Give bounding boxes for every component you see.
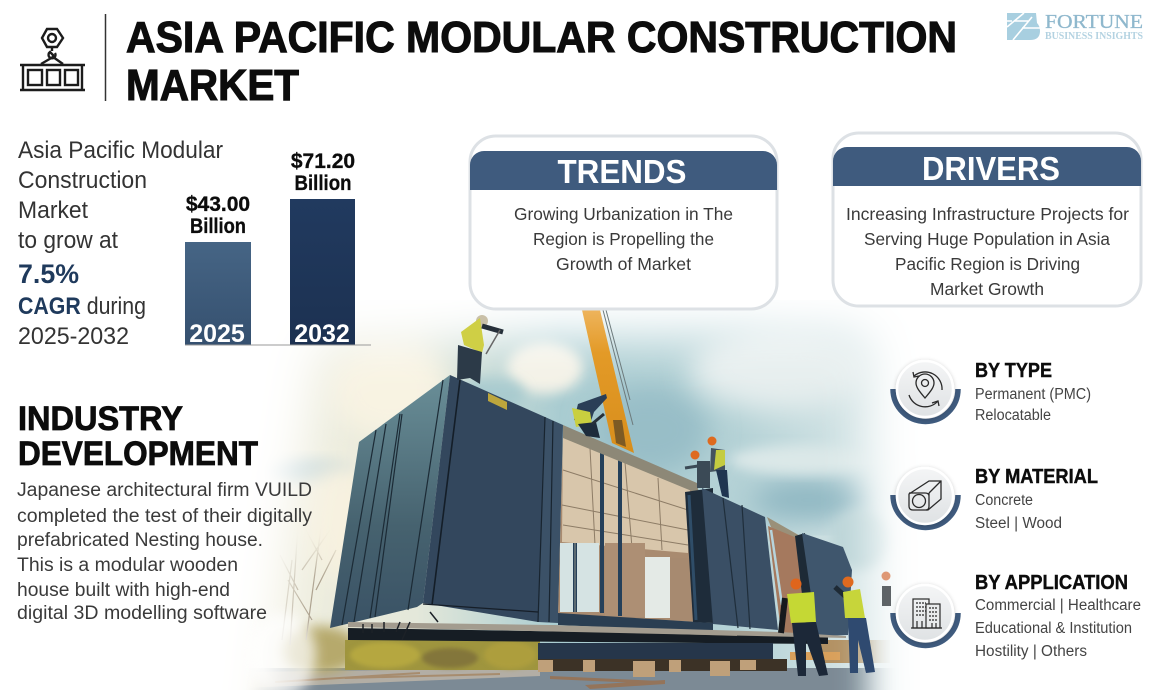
distant worker <box>882 572 891 606</box>
bar 2032: 2032 <box>294 320 350 348</box>
icon: by type <box>893 361 958 422</box>
logo: Fortune Business Insights: BUSINESS INSIGHTS <box>1045 31 1143 42</box>
logo: Fortune Business Insights: FORTUNE <box>1045 11 1143 33</box>
panel: drivers: Pacific Region is Driving <box>895 254 1080 274</box>
market growth text: Asia Pacific Modular <box>18 137 223 164</box>
floor beam and pedestal <box>348 628 828 689</box>
panel: trends: TRENDS <box>558 153 686 190</box>
crane boom <box>582 310 634 453</box>
photo: modular unit lifted by crane <box>250 310 896 690</box>
bar 2025: Billion <box>190 215 246 238</box>
market growth text: Construction <box>18 167 147 194</box>
industry development heading: INDUSTRY <box>18 400 183 438</box>
panel: trends <box>470 136 777 309</box>
by material text: Concrete <box>975 492 1033 509</box>
header divider <box>104 14 106 101</box>
worker ground right <box>835 576 875 673</box>
bar 2032: Billion <box>294 172 352 195</box>
container front panel <box>423 375 545 622</box>
market growth text: to grow at <box>18 227 118 254</box>
bar 2032: $71.20 <box>291 150 355 173</box>
by type text: Relocatable <box>975 407 1051 424</box>
title: MARKET <box>126 61 299 110</box>
worker pair on roof <box>685 436 729 498</box>
industry development heading <box>18 400 258 473</box>
industry development body text <box>17 480 313 624</box>
by type text: Permanent (PMC) <box>975 386 1091 403</box>
industry development body text: house built with high-end <box>17 580 230 601</box>
industry development body text: This is a modular wooden <box>17 555 238 576</box>
icon: by application <box>893 585 958 646</box>
panel: drivers: Increasing Infrastructure Projects for <box>846 204 1129 224</box>
panel: trends: Growing Urbanization in The <box>514 204 733 224</box>
bar 2025: $43.00 <box>186 193 250 216</box>
by type text: BY TYPE <box>975 360 1052 382</box>
industry development heading: DEVELOPMENT <box>18 435 258 473</box>
by application text: Educational & Institution <box>975 620 1132 637</box>
workers <box>457 315 891 676</box>
title <box>126 13 957 110</box>
icon: by material <box>893 468 958 528</box>
panel: drivers: DRIVERS <box>922 150 1060 187</box>
by material text: Steel | Wood <box>975 515 1062 532</box>
market growth text: Market <box>18 197 88 224</box>
market growth text: 7.5% <box>18 259 79 289</box>
by type text <box>975 360 1091 424</box>
bar 2025: 2025 <box>189 320 245 348</box>
worker on roof left <box>457 315 503 384</box>
worker bending <box>572 394 607 438</box>
panel: trends: Region is Propelling the <box>533 229 714 249</box>
by application text: Commercial | Healthcare <box>975 597 1141 614</box>
ground and trees <box>258 542 886 690</box>
sky and clouds background <box>256 310 894 690</box>
title: ASIA PACIFIC MODULAR CONSTRUCTION <box>126 13 957 62</box>
by material text: BY MATERIAL <box>975 466 1098 488</box>
bar chart: market size <box>185 150 371 348</box>
worker ground left <box>781 578 828 676</box>
industry development body text: prefabricated Nesting house. <box>17 530 263 551</box>
right wall panels <box>685 488 713 623</box>
by application text: Hostility | Others <box>975 643 1087 660</box>
by application text <box>975 572 1141 660</box>
industry development body text: digital 3D modelling software <box>17 603 267 624</box>
logo: Fortune Business Insights <box>1007 11 1143 42</box>
industry development body text: Japanese architectural firm VUILD <box>17 480 312 501</box>
bar 2032 <box>290 150 355 348</box>
header icon: crane hook and container <box>20 29 85 90</box>
floor trim <box>348 622 846 638</box>
panel: drivers <box>833 133 1141 306</box>
industry development body text: completed the test of their digitally <box>17 506 313 527</box>
by application text: BY APPLICATION <box>975 572 1128 594</box>
bar 2025 <box>185 193 251 348</box>
panel: drivers: Serving Huge Population in Asia <box>864 229 1110 249</box>
by material text <box>975 466 1098 532</box>
container end face <box>330 375 450 628</box>
container interior <box>558 436 697 622</box>
market growth text <box>18 137 223 350</box>
panel: drivers: Market Growth <box>930 279 1044 299</box>
market growth text: CAGR during <box>18 293 146 320</box>
market growth text: 2025-2032 <box>18 323 129 350</box>
panel: trends: Growth of Market <box>556 254 691 274</box>
